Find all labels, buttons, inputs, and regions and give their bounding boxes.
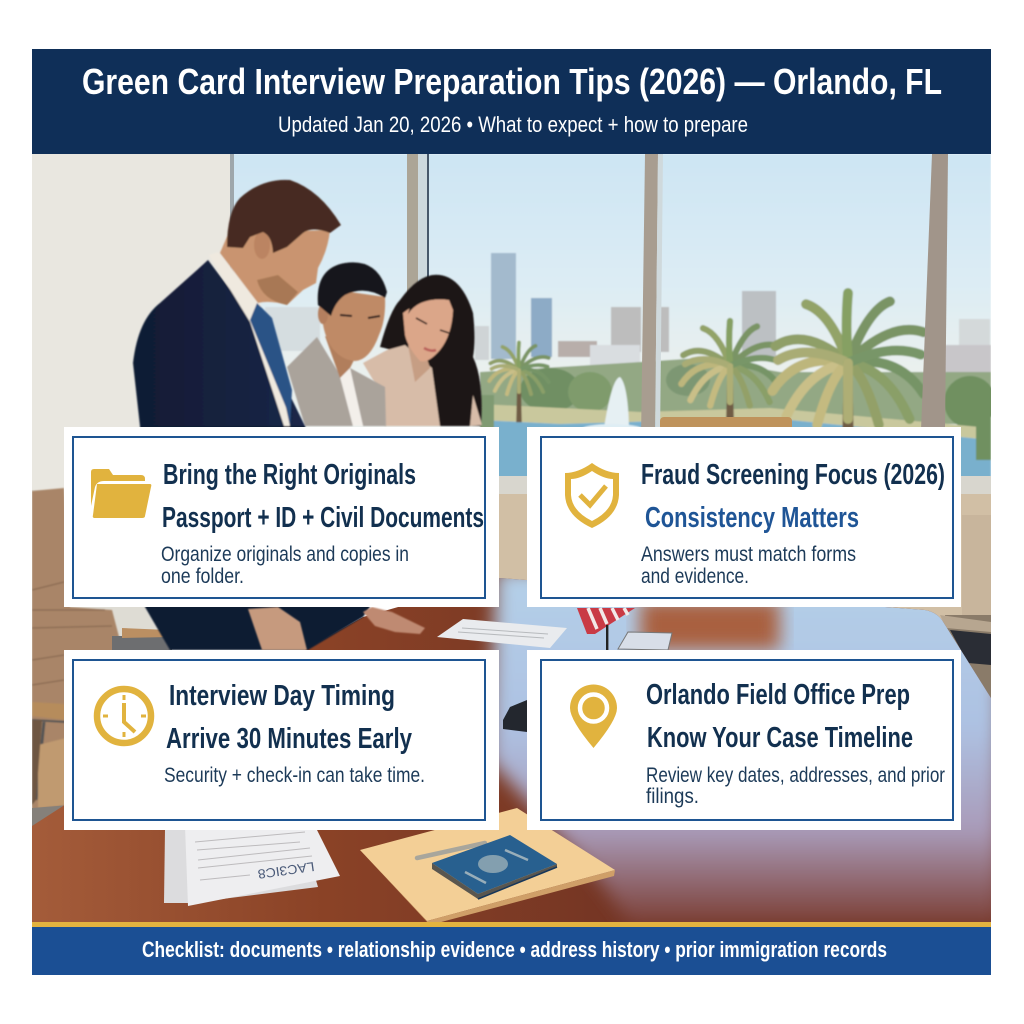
chair back behind table <box>660 417 792 431</box>
green behind woman <box>480 395 494 435</box>
t-shirt <box>340 368 363 426</box>
icon: location pin <box>570 684 617 748</box>
small paper <box>618 632 672 650</box>
card subheading: Passport + ID + Civil Documents <box>162 502 484 534</box>
card subheading: Arrive 30 Minutes Early <box>166 723 412 755</box>
window sill <box>497 476 991 494</box>
phone <box>503 700 527 732</box>
header banner <box>32 49 991 154</box>
american flag <box>577 608 635 652</box>
table top <box>32 570 1000 930</box>
card body: Organize originals and copies in <box>161 543 409 566</box>
sheet on table <box>437 619 567 648</box>
left wall <box>32 154 234 499</box>
window with skyline view <box>232 154 996 496</box>
card subheading: Consistency Matters <box>645 502 859 534</box>
left chair <box>32 488 125 812</box>
table reflection <box>490 570 1000 925</box>
face <box>403 299 453 362</box>
subtitle: Updated Jan 20, 2026 • What to expect + how to prepare <box>278 112 748 137</box>
suit <box>133 260 305 426</box>
skin <box>220 225 330 305</box>
hair <box>318 262 387 316</box>
chair armrest <box>122 628 170 638</box>
papers bottom left <box>164 826 340 906</box>
card heading: Bring the Right Originals <box>163 459 416 491</box>
papers bottom left: LAC3IC8 <box>257 859 315 882</box>
shirt collar <box>209 252 290 426</box>
card body: Answers must match forms <box>641 543 856 566</box>
manila folder <box>360 808 615 921</box>
footer banner <box>32 922 991 975</box>
card subheading: Know Your Case Timeline <box>647 722 913 754</box>
card: fraud screening focus <box>527 427 961 607</box>
card body: one folder. <box>161 565 244 588</box>
card: bring the right originals <box>64 427 499 607</box>
card body: Review key dates, addresses, and prior <box>646 764 945 787</box>
tie <box>250 303 292 426</box>
fountain <box>604 377 629 428</box>
window frames <box>230 154 948 494</box>
passport <box>432 835 557 894</box>
pen <box>417 843 485 858</box>
distant trees <box>480 358 991 425</box>
office photo background <box>32 154 1000 930</box>
icon: shield with check <box>565 463 619 528</box>
lawn <box>480 404 991 440</box>
lead man in navy suit <box>133 180 370 650</box>
hands <box>248 607 307 650</box>
hair <box>227 180 341 253</box>
jacket <box>287 337 353 426</box>
card body: filings. <box>646 785 699 808</box>
floor behind suit <box>112 636 172 650</box>
ear <box>254 231 270 259</box>
lake <box>480 418 991 494</box>
card heading: Interview Day Timing <box>169 680 395 712</box>
floor left <box>32 805 70 827</box>
left wall lower <box>32 490 162 830</box>
card: orlando field office prep <box>527 650 961 830</box>
hair <box>380 275 482 426</box>
woman <box>363 275 482 426</box>
right chair and floor <box>945 615 991 710</box>
middle man <box>287 262 387 426</box>
lower wall <box>497 494 991 624</box>
icon: clock <box>97 689 151 743</box>
card body: Security + check-in can take time. <box>164 764 425 787</box>
card: interview day timing <box>64 650 499 830</box>
card heading: Orlando Field Office Prep <box>646 679 910 711</box>
blouse <box>363 345 440 426</box>
neck and face <box>325 336 358 378</box>
card body: and evidence. <box>641 565 749 588</box>
icon: folder <box>91 469 151 518</box>
